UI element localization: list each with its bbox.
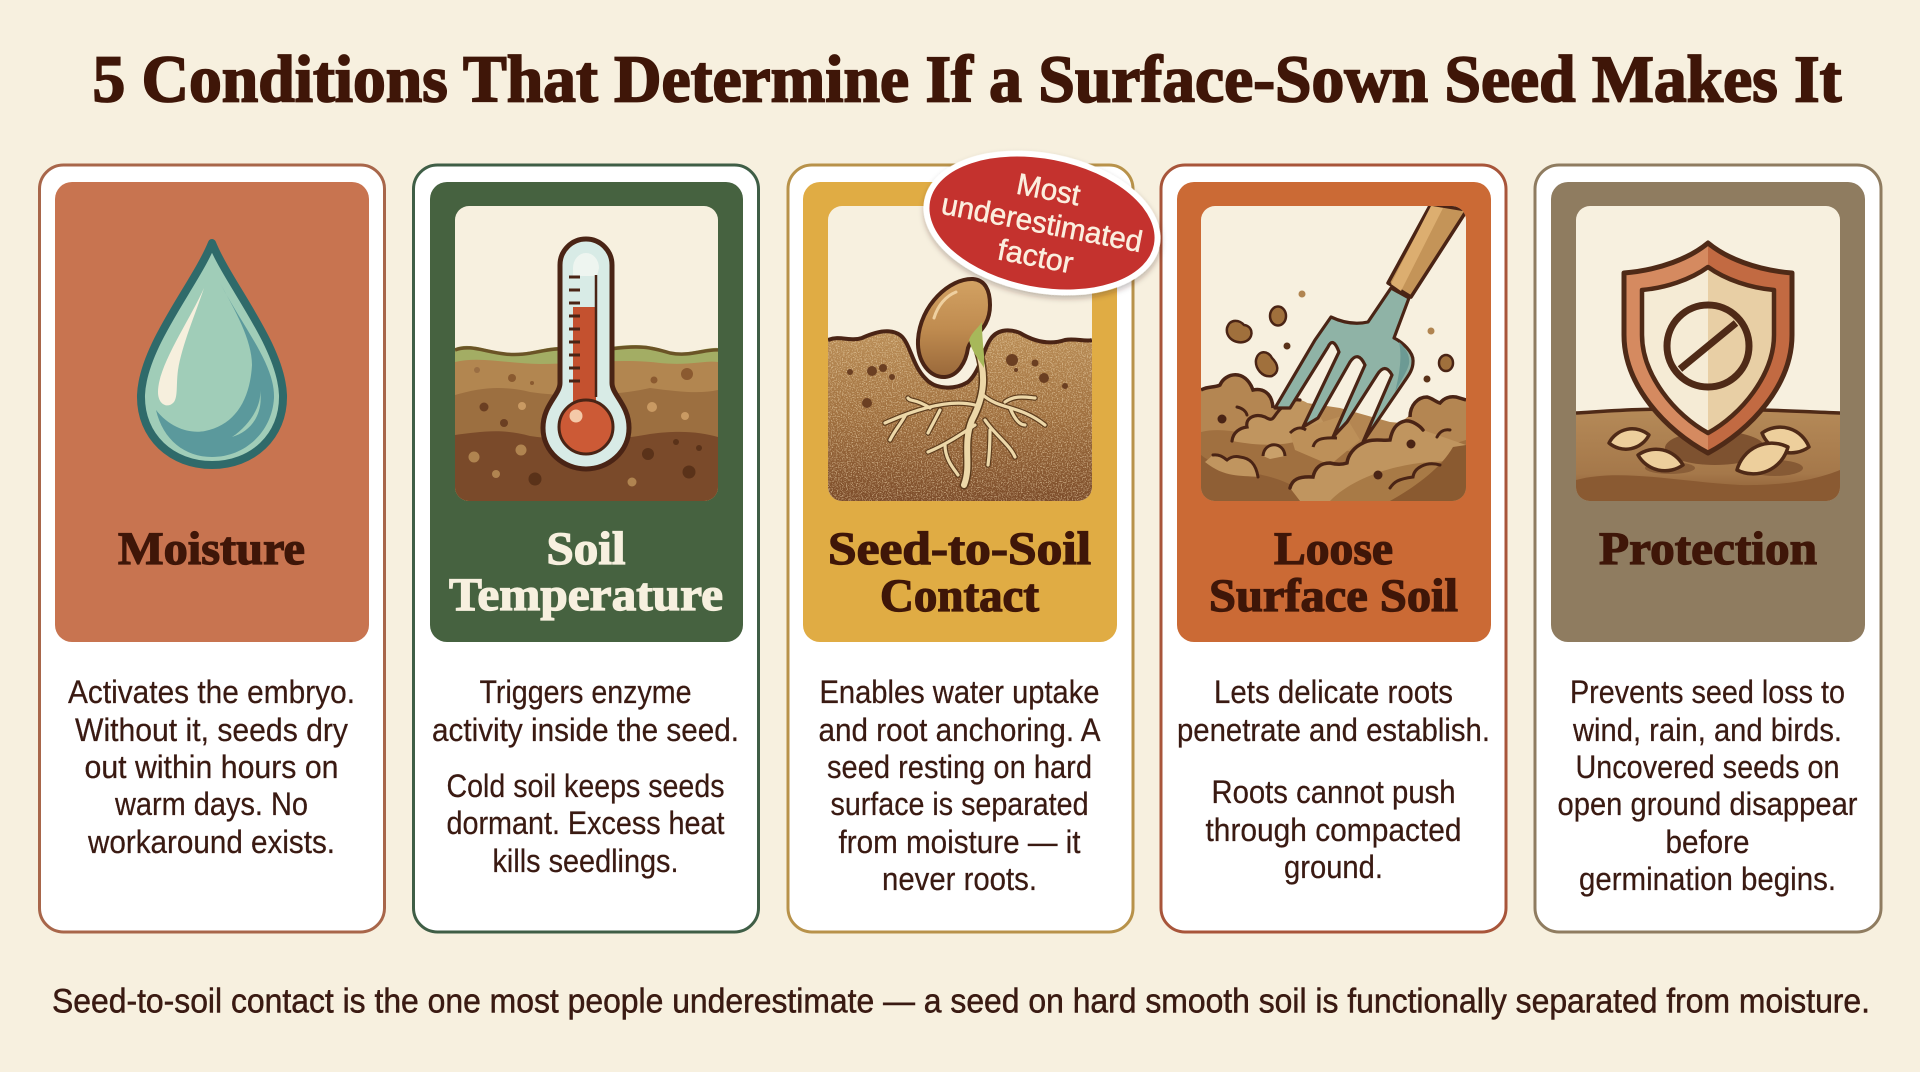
icon: garden fork in loose soil bbox=[1201, 204, 1467, 501]
body text: moisture: Without it, seeds dry bbox=[75, 712, 348, 748]
body text: seed-to-soil contact: from moisture — it bbox=[838, 824, 1081, 860]
panel: moisture bbox=[40, 165, 384, 932]
body text: soil temperature: activity inside the seed. bbox=[432, 712, 739, 748]
seeds bbox=[1609, 427, 1809, 474]
body text: seed-to-soil contact: seed resting on hard bbox=[827, 749, 1092, 785]
icon: water drop bbox=[141, 243, 283, 465]
shield bbox=[1626, 246, 1708, 450]
body text: soil temperature bbox=[432, 674, 739, 879]
callout: most underestimated factor badge: factor bbox=[995, 233, 1076, 280]
body text: seed-to-soil contact bbox=[818, 674, 1101, 897]
heading: moisture: Moisture bbox=[118, 523, 305, 575]
body text: moisture: warm days. No bbox=[114, 786, 308, 822]
body text: moisture: Activates the embryo. bbox=[68, 674, 355, 710]
callout: most underestimated factor badge: Most bbox=[1014, 168, 1084, 213]
body text: loose surface soil: Lets delicate roots bbox=[1214, 674, 1453, 710]
title: 5 Conditions That Determine If a Surface-Sown Seed Makes It bbox=[92, 42, 1842, 116]
body text: seed-to-soil contact: Enables water uptake bbox=[820, 674, 1100, 710]
body text: seed-to-soil contact: and root anchoring. A bbox=[818, 712, 1101, 748]
card frame bbox=[1161, 165, 1506, 932]
body text: loose surface soil: ground. bbox=[1284, 849, 1383, 885]
card frame bbox=[414, 165, 758, 932]
body text: moisture: out within hours on bbox=[84, 749, 338, 785]
colour header bbox=[55, 182, 369, 642]
body text: protection: wind, rain, and birds. bbox=[1572, 712, 1842, 748]
soil lumps bbox=[1201, 400, 1466, 501]
colour header bbox=[1551, 182, 1865, 642]
body text: soil temperature: Triggers enzyme bbox=[480, 674, 692, 710]
card frame bbox=[1535, 165, 1881, 932]
handle bbox=[1388, 204, 1467, 297]
body text: protection: Uncovered seeds on bbox=[1576, 749, 1840, 785]
body text: protection: germination begins. bbox=[1579, 861, 1836, 897]
body text: protection bbox=[1558, 674, 1858, 897]
clods bbox=[1227, 306, 1453, 376]
body text: loose surface soil: through compacted bbox=[1206, 812, 1462, 848]
heading: soil temperature: Soil bbox=[546, 523, 626, 575]
colour header bbox=[430, 182, 743, 642]
body text: seed-to-soil contact: never roots. bbox=[882, 861, 1037, 897]
heading: seed-to-soil contact: Seed-to-Soil bbox=[828, 523, 1091, 575]
body text: protection: before bbox=[1666, 824, 1750, 860]
fork head bbox=[1275, 288, 1413, 442]
colour header bbox=[1177, 182, 1491, 642]
panel: soil temperature bbox=[414, 165, 758, 932]
colour header bbox=[803, 182, 1117, 642]
body text: seed-to-soil contact: surface is separated bbox=[830, 786, 1088, 822]
thermometer bbox=[543, 239, 629, 469]
heading: protection: Protection bbox=[1599, 523, 1817, 575]
back soil bbox=[1201, 376, 1466, 452]
panel: seed-to-soil contact bbox=[788, 165, 1133, 932]
callout: most underestimated factor badge bbox=[911, 131, 1173, 315]
heading: soil temperature: Temperature bbox=[449, 569, 723, 621]
body text: protection: open ground disappear bbox=[1558, 786, 1858, 822]
body text: soil temperature: Cold soil keeps seeds bbox=[446, 768, 724, 804]
body text: loose surface soil: Roots cannot push bbox=[1212, 774, 1456, 810]
icon: seed rooting in soil bbox=[828, 206, 1092, 501]
heading: soil temperature bbox=[449, 523, 723, 621]
icon: thermometer in soil bbox=[455, 206, 718, 501]
body text: loose surface soil: penetrate and establish. bbox=[1177, 712, 1490, 748]
callout: most underestimated factor badge: underestimated bbox=[939, 188, 1145, 259]
body text: soil temperature: dormant. Excess heat bbox=[446, 805, 725, 841]
heading: seed-to-soil contact: Contact bbox=[880, 570, 1039, 622]
heading: loose surface soil bbox=[1209, 523, 1458, 622]
body text: protection: Prevents seed loss to bbox=[1570, 674, 1845, 710]
card frame bbox=[40, 165, 384, 932]
panel: protection bbox=[1535, 165, 1881, 932]
heading: loose surface soil: Surface Soil bbox=[1209, 570, 1458, 622]
icon: shield over seeds bbox=[1576, 206, 1840, 501]
heading: seed-to-soil contact bbox=[828, 523, 1091, 622]
body text: loose surface soil bbox=[1177, 674, 1490, 885]
body text: moisture bbox=[68, 674, 355, 860]
heading: loose surface soil: Loose bbox=[1274, 523, 1393, 575]
body text: moisture: workaround exists. bbox=[87, 824, 335, 860]
card frame bbox=[788, 165, 1133, 932]
body text: soil temperature: kills seedlings. bbox=[492, 843, 678, 879]
panel: loose surface soil bbox=[1161, 165, 1506, 932]
